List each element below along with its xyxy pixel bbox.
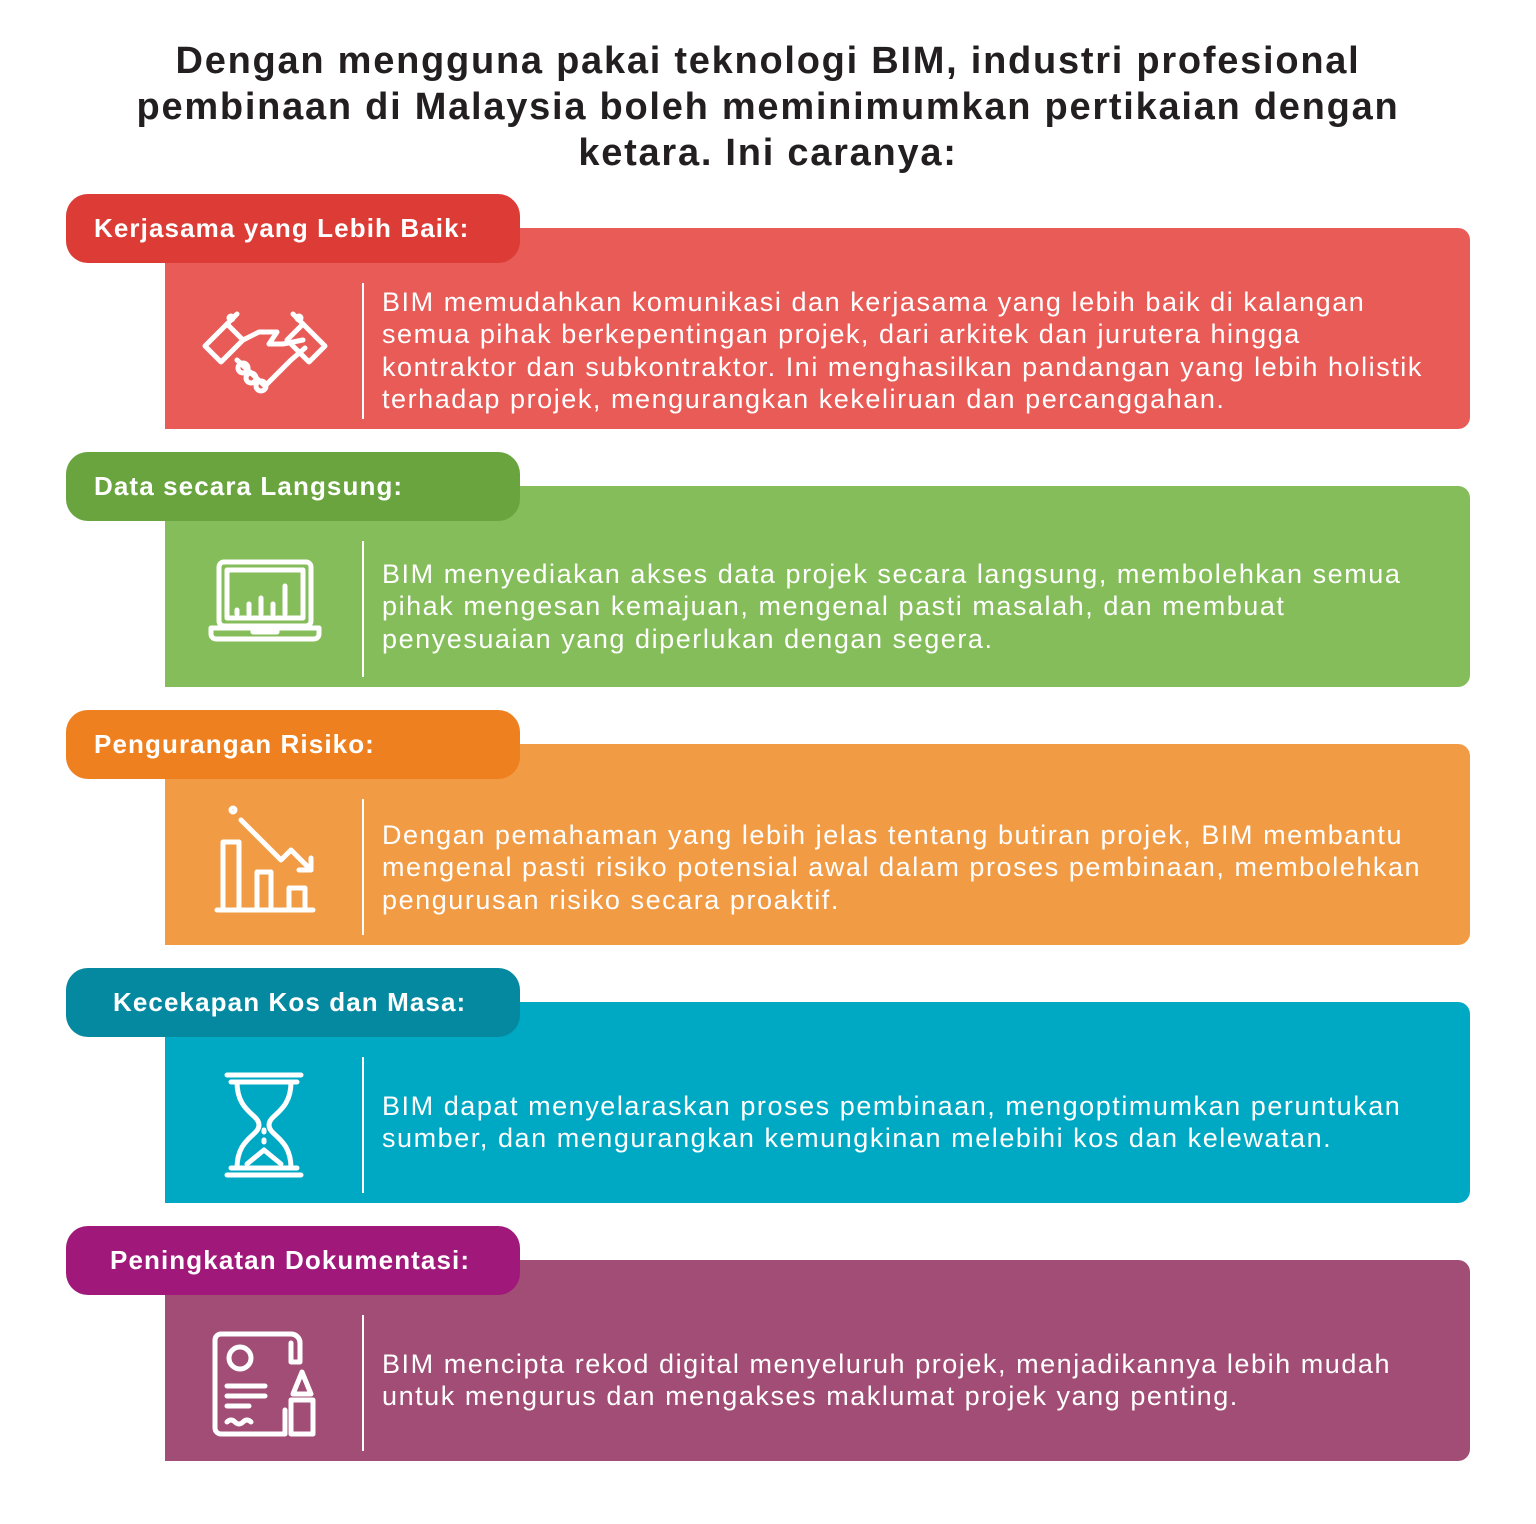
- text: Kerjasama: semua pihak berkepentingan projek, dari arkitek dan jurutera hingga: [382, 319, 1301, 349]
- text: Risiko: pengurusan risiko secara proaktif.: [382, 885, 840, 915]
- panel: Kos: [165, 1002, 1470, 1203]
- tab: Dokumentasi: [66, 1226, 520, 1295]
- tab: Kos: [66, 968, 520, 1037]
- icon: hourglass: [224, 1072, 304, 1178]
- text: Risiko: mengenal pasti risiko potensial awal dalam proses pembinaan, membolehkan: [382, 852, 1421, 882]
- section: Kerjasama: [66, 194, 1470, 429]
- text: Dokumentasi: [382, 1349, 1391, 1411]
- section: Dokumentasi: [66, 1226, 1470, 1461]
- text: Kos: [382, 1091, 1401, 1153]
- tab: Data: Data secara Langsung:: [94, 471, 403, 501]
- icon: handshake: [202, 312, 328, 394]
- tab: Risiko: [66, 710, 520, 779]
- text: Data: BIM menyediakan akses data projek secara langsung, membolehkan semua: [382, 559, 1401, 589]
- tab: Kerjasama: [66, 194, 520, 263]
- text: Dokumentasi: untuk mengurus dan mengakses maklumat projek yang penting.: [382, 1381, 1239, 1411]
- tab: Kerjasama: Kerjasama yang Lebih Baik:: [94, 213, 469, 243]
- title: ketara. Ini caranya:: [578, 132, 958, 174]
- icon: declining chart: [214, 806, 316, 912]
- text: Risiko: Dengan pemahaman yang lebih jelas tentang butiran projek, BIM membantu: [382, 820, 1403, 850]
- icon: document with pen: [212, 1332, 316, 1436]
- tab: Dokumentasi: Peningkatan Dokumentasi:: [110, 1245, 470, 1275]
- text: Data: pihak mengesan kemajuan, mengenal pasti masalah, dan membuat: [382, 591, 1286, 621]
- title: [137, 40, 1399, 174]
- panel: Risiko: [165, 744, 1470, 945]
- section: Kos dan Masa: [66, 968, 1470, 1203]
- text: Kerjasama: terhadap projek, mengurangkan kekeliruan dan percanggahan.: [382, 384, 1225, 414]
- title: Dengan mengguna pakai teknologi BIM, industri profesional: [176, 40, 1360, 82]
- panel: Data: [165, 486, 1470, 687]
- panel: Kerjasama: [165, 228, 1470, 429]
- section: Data: [66, 452, 1470, 687]
- text: Kerjasama: [382, 287, 1423, 414]
- tab: Risiko: Pengurangan Risiko:: [94, 729, 375, 759]
- icon: laptop: [208, 560, 322, 642]
- text: Dokumentasi: BIM mencipta rekod digital menyeluruh projek, menjadikannya lebih mudah: [382, 1349, 1391, 1379]
- text: Data: [382, 559, 1401, 654]
- text: Data: penyesuaian yang diperlukan dengan segera.: [382, 624, 994, 654]
- section: Risiko: [66, 710, 1470, 945]
- text: Kerjasama: kontraktor dan subkontraktor. Ini menghasilkan pandangan yang lebih holistik: [382, 352, 1423, 382]
- title: pembinaan di Malaysia boleh meminimumkan pertikaian dengan: [137, 86, 1399, 128]
- text: Risiko: [382, 820, 1421, 915]
- text: Kerjasama: BIM memudahkan komunikasi dan kerjasama yang lebih baik di kalangan: [382, 287, 1365, 317]
- text: Kos: BIM dapat menyelaraskan proses pembinaan, mengoptimumkan peruntukan: [382, 1091, 1401, 1121]
- tab: Data: [66, 452, 520, 521]
- tab: Kos: Kecekapan Kos dan Masa:: [113, 987, 466, 1017]
- panel: Dokumentasi: [165, 1260, 1470, 1461]
- text: Kos: sumber, dan mengurangkan kemungkinan melebihi kos dan kelewatan.: [382, 1123, 1332, 1153]
